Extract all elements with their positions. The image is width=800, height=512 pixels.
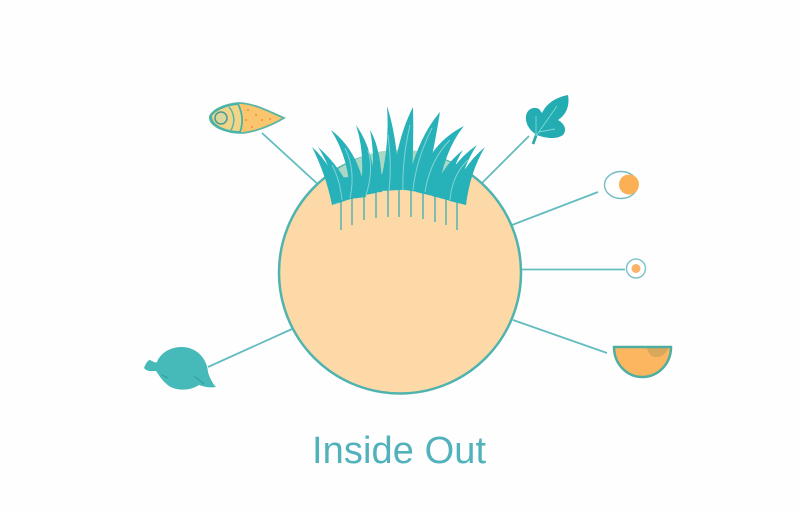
connector: small dot to circle: [522, 268, 625, 270]
connector: eye to circle: [512, 192, 598, 225]
central circle: [279, 152, 521, 394]
connector: whale to circle: [208, 329, 292, 367]
connector: bowl to circle: [513, 320, 607, 353]
grass tuft: [312, 106, 485, 230]
grass roots: [341, 190, 457, 230]
connector: leaf to circle: [477, 136, 529, 188]
icon: small dot: [626, 259, 646, 278]
icon: bowl: [614, 347, 671, 377]
icon: fish: [210, 103, 284, 133]
icon: whale: [144, 347, 216, 390]
grass blades: [312, 106, 485, 205]
icon: eye: [604, 172, 639, 198]
connector: fish to circle: [262, 133, 322, 188]
grass highlights: [332, 125, 468, 200]
icon: leaf: [526, 95, 569, 144]
title: Inside Out: [312, 430, 486, 472]
pale cap behind grass: [335, 150, 465, 205]
